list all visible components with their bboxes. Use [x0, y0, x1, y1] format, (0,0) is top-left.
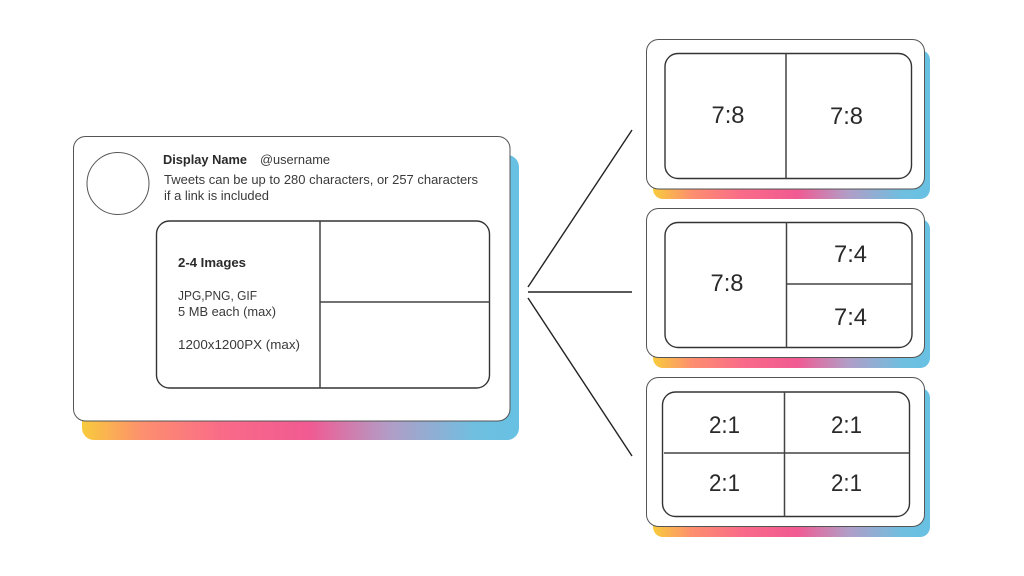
ratio label: 2:1 — [831, 470, 862, 497]
image specs: JPG,PNG, GIF — [178, 289, 257, 303]
gradient shadow of main card — [82, 155, 519, 440]
panel: four images layout — [646, 378, 930, 537]
image grid — [665, 222, 912, 348]
panel: three images layout — [646, 208, 930, 368]
card body — [646, 40, 924, 189]
gradient shadow — [653, 219, 930, 368]
gradient shadow — [653, 50, 930, 199]
image specs: 5 MB each (max) — [178, 305, 276, 319]
image specs — [178, 289, 300, 352]
image specs heading: 2-4 Images — [178, 256, 246, 270]
tweet description line one: Tweets can be up to 280 characters, or 257 characters — [164, 173, 478, 187]
ratio label: 7:8 — [712, 102, 744, 129]
image specs: 1200x1200PX (max) — [178, 338, 300, 352]
image grid — [156, 221, 490, 388]
avatar circle — [87, 152, 149, 214]
gradient shadow — [653, 388, 930, 537]
ratio label: 7:4 — [834, 241, 867, 268]
ratio label: 2:1 — [709, 470, 740, 497]
tweet description line two: if a link is included — [164, 189, 269, 203]
image grid — [665, 54, 912, 178]
ratio label: 7:8 — [710, 270, 744, 297]
ratio label: 2:1 — [831, 412, 862, 439]
ratio label: 2:1 — [709, 412, 740, 439]
tweet card body — [74, 136, 510, 421]
username: @username — [260, 153, 330, 167]
image grid — [662, 392, 910, 516]
ratio label: 7:4 — [834, 304, 867, 331]
ratio label: 7:8 — [830, 103, 863, 130]
arrows: connector lines — [528, 130, 632, 456]
panel: two images layout — [646, 40, 930, 199]
display name: Display Name — [163, 153, 247, 167]
card body — [646, 378, 924, 526]
panel: main tweet card — [74, 136, 519, 440]
card body — [646, 208, 924, 358]
